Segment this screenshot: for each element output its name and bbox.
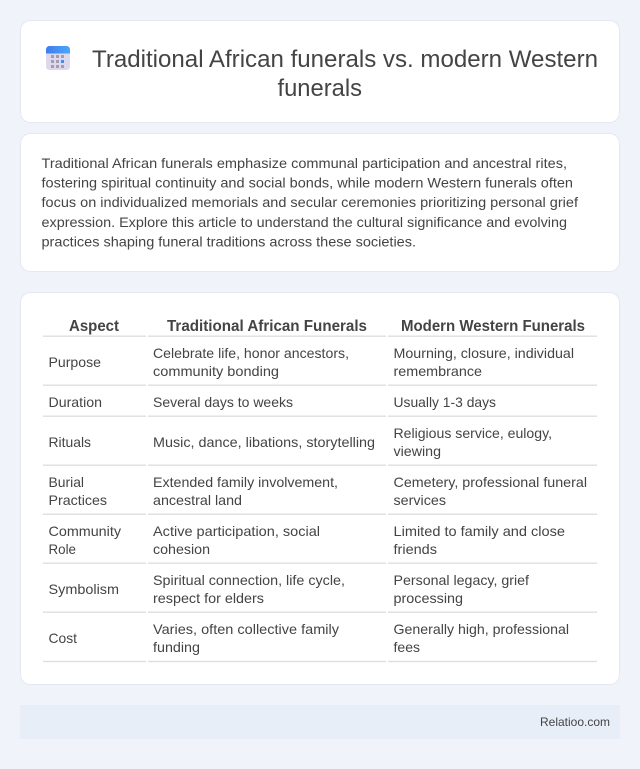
text block: introduction: expression. Explore this article to understand the cultural significance and evolving (42, 214, 567, 230)
row: symbolism: Personal legacy, grief (394, 572, 529, 588)
table header: Aspect (69, 318, 120, 335)
text block: introduction: Traditional African funerals emphasize communal participation and ancestral rites, (42, 155, 567, 171)
panel: introduction (20, 134, 620, 272)
row: cost: Varies, often collective family (153, 621, 339, 637)
row: burial practices: Cemetery, professional funeral (394, 474, 587, 490)
row: cost: funding (153, 639, 200, 655)
row: duration: Duration (48, 394, 102, 410)
title: funerals (278, 75, 362, 102)
row: rituals: Religious service, eulogy, (394, 425, 552, 441)
row: duration: Several days to weeks (153, 394, 293, 410)
title (92, 46, 598, 102)
footer: Relatioo.com (540, 715, 610, 729)
panel: title card (20, 20, 620, 122)
row: purpose: Celebrate life, honor ancestors, (153, 345, 349, 361)
icon: calendar (46, 46, 70, 70)
row: rituals: Rituals (48, 434, 91, 450)
row: symbolism: respect for elders (153, 590, 264, 606)
row: purpose: community bonding (153, 363, 279, 379)
row: community role: Community (48, 523, 121, 539)
row: symbolism: Symbolism (48, 581, 119, 597)
row: purpose (48, 345, 574, 379)
row: community role: Limited to family and close (394, 523, 565, 539)
row: symbolism (48, 572, 529, 606)
row: burial practices: Extended family involvement, (153, 474, 338, 490)
row: rituals: Music, dance, libations, storytelling (153, 434, 375, 450)
row: cost: Generally high, professional (394, 621, 569, 637)
text block: introduction (42, 155, 578, 249)
row: cost: Cost (48, 630, 77, 646)
panel: comparison table (20, 292, 620, 684)
row: rituals: viewing (394, 443, 441, 459)
text block: introduction: focus on individualized memorials and secular ceremonies prioritizing personal grief (42, 194, 578, 210)
row: rituals (48, 425, 552, 459)
table header (69, 318, 585, 335)
row: purpose: remembrance (394, 363, 482, 379)
row: community role (48, 523, 565, 557)
row: cost: fees (394, 639, 420, 655)
row: community role: cohesion (153, 541, 210, 557)
row: duration (48, 394, 496, 410)
text block: introduction: fostering spiritual continuity and social bonds, while modern Western funerals often (42, 175, 573, 191)
text block: introduction: practices shaping funeral traditions across these societies. (42, 233, 416, 249)
row: duration: Usually 1-3 days (394, 394, 496, 410)
footer (20, 705, 620, 739)
row: community role: Active participation, social (153, 523, 320, 539)
table header: Traditional African Funerals (167, 318, 367, 335)
table header: Modern Western Funerals (401, 318, 585, 335)
row: burial practices (48, 474, 587, 508)
row: community role: Role (48, 541, 76, 557)
row: burial practices: services (394, 492, 446, 508)
row: burial practices: ancestral land (153, 492, 242, 508)
row: burial practices: Practices (48, 492, 107, 508)
row: cost (48, 621, 569, 655)
row: symbolism: processing (394, 590, 463, 606)
row: community role: friends (394, 541, 437, 557)
row: purpose: Mourning, closure, individual (394, 345, 574, 361)
row: symbolism: Spiritual connection, life cycle, (153, 572, 345, 588)
row: purpose: Purpose (48, 354, 101, 370)
title: Traditional African funerals vs. modern Western (92, 46, 598, 73)
row: burial practices: Burial (48, 474, 84, 490)
